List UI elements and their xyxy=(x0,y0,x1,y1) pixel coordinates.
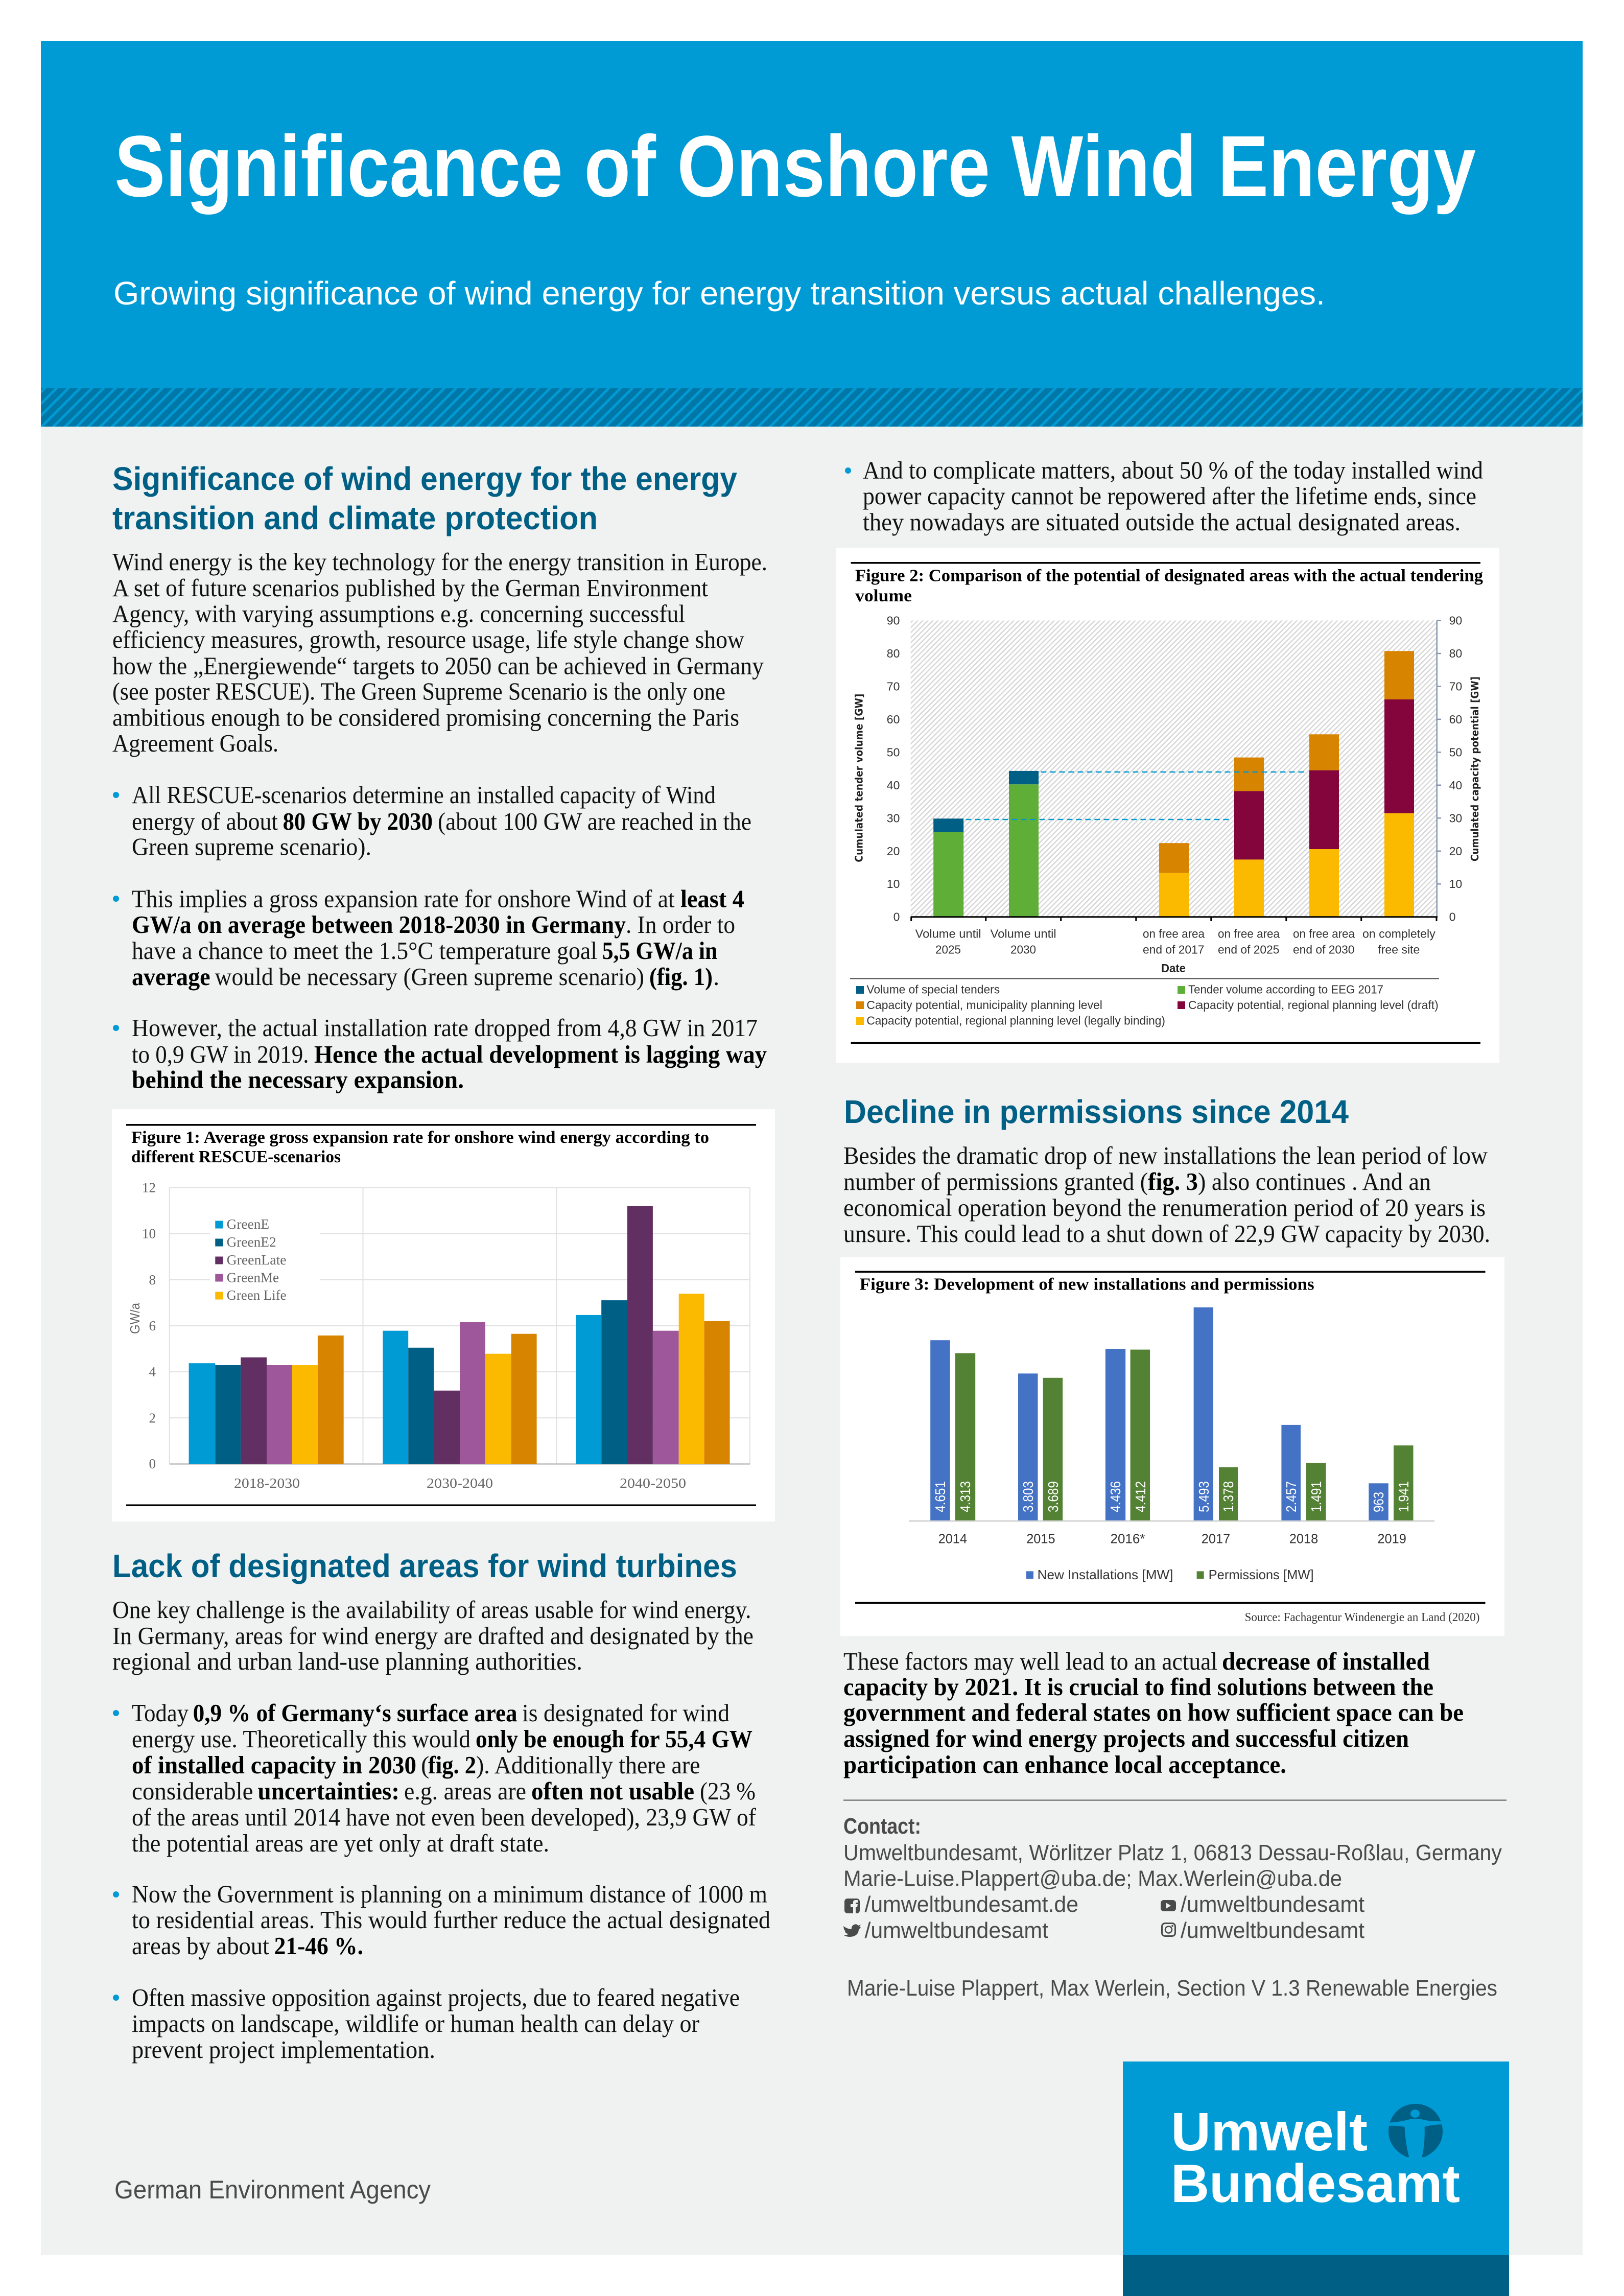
legend: New Installations [MW] xyxy=(1038,1567,1173,1582)
axes xyxy=(911,620,1441,921)
panel: figure 1 xyxy=(112,1109,775,1521)
bars: 2019 xyxy=(1369,1445,1413,1520)
figure 1 title: different RESCUE-scenarios xyxy=(131,1147,341,1166)
bullet: surface area: Today xyxy=(132,1699,189,1727)
y axis labels: 6 xyxy=(149,1318,156,1333)
x axis title: Date xyxy=(1161,962,1186,975)
subtitle: Growing significance of wind energy for energy transition versus actual challenges. xyxy=(113,275,1325,312)
bullet: expansion rate: 5,5 GW/a in xyxy=(602,936,717,965)
bars: 2016 xyxy=(1105,1349,1150,1520)
year labels: 2019 xyxy=(1377,1531,1406,1547)
bullet: opposition xyxy=(113,1983,740,2064)
figure 2 title: volume xyxy=(855,587,912,605)
twitter handle: /umweltbundesamt xyxy=(864,1918,1048,1943)
instagram handle: /umweltbundesamt xyxy=(1181,1918,1364,1943)
bullet: expansion rate: (fig. 1) xyxy=(649,963,713,991)
bullet: minimum distance: 21-46 %. xyxy=(274,1932,363,1960)
dashed reference lines xyxy=(966,772,1307,819)
bars: 2018-2030 xyxy=(189,1336,344,1464)
right axis numbers: 50 xyxy=(1449,745,1462,759)
bullet: surface area: often not usable xyxy=(531,1777,694,1805)
right axis numbers: 20 xyxy=(1449,845,1462,858)
bullet: expansion rate: This implies a gross expansion rate for onshore Wind of at xyxy=(132,885,675,912)
bullet: installed capacity xyxy=(113,781,751,860)
bars: 2017 xyxy=(1194,1307,1238,1520)
left axis numbers: 30 xyxy=(887,811,900,825)
bullet: expansion rate xyxy=(113,885,744,991)
y axis labels: 8 xyxy=(149,1272,156,1287)
icon: twitter xyxy=(843,1924,861,1937)
paragraph: key challenge xyxy=(112,1596,754,1675)
bullet: surface area: only be enough for 55,4 GW xyxy=(476,1725,752,1753)
logo block xyxy=(1123,2061,1509,2296)
y axis labels: 12 xyxy=(142,1180,156,1196)
logo wordmark: Umwelt: Umwelt xyxy=(1171,2102,1368,2162)
bullet: opposition: impacts on landscape, wildlife or human health can delay or xyxy=(132,2009,699,2037)
right axis numbers: 70 xyxy=(1449,680,1462,693)
paragraph: decline: number of permissions granted ( xyxy=(843,1167,1148,1196)
paragraph: decline: economical operation beyond the renumeration period of 20 years is xyxy=(843,1193,1486,1222)
bullet: installed capacity: (about 100 GW are reached in the xyxy=(438,807,751,835)
x axis category labels: free site xyxy=(1378,943,1420,956)
left axis numbers: 80 xyxy=(887,647,900,660)
x axis category labels: Volume until xyxy=(915,927,981,940)
contact block xyxy=(843,1814,1502,1943)
bars: 2017: 1.378 xyxy=(1220,1481,1236,1512)
legend: Volume of special tenders xyxy=(866,983,1000,996)
x axis category labels: end of 2025 xyxy=(1218,943,1279,956)
bullet: actual installation rate: Hence the actual development is lagging way xyxy=(314,1040,767,1068)
bars: 2014: 4.313 xyxy=(957,1481,973,1512)
bullet: actual installation rate: to 0,9 GW in 2019. xyxy=(132,1040,309,1068)
bullet: expansion rate: . xyxy=(713,963,719,991)
x axis category labels xyxy=(915,927,1435,956)
figure 1 title: Figure 1: Average gross expansion rate for onshore wind energy according to xyxy=(131,1128,709,1147)
heading: lack of designated areas: Lack of designated areas for wind turbines xyxy=(112,1548,737,1584)
panel: figure 3 xyxy=(840,1257,1504,1636)
bullet: actual installation rate xyxy=(113,1014,767,1094)
intro paragraph: Agency, with varying assumptions e.g. concerning successful xyxy=(112,600,685,627)
icon: human emblem xyxy=(1387,2104,1444,2158)
bars: 2015: 3.689 xyxy=(1045,1481,1061,1512)
y axis labels: 2 xyxy=(149,1410,156,1425)
bar: volume until 2030 xyxy=(1009,771,1039,917)
paragraph: decline: ) also continues . And an xyxy=(1198,1167,1431,1196)
contact emails: Marie-Luise.Plappert@uba.de; Max.Werlein@uba.de xyxy=(843,1866,1342,1891)
y axis title: GW/a xyxy=(127,1303,143,1334)
legend xyxy=(856,983,1439,1027)
x axis labels: 2040-2050 xyxy=(620,1475,686,1491)
heading: significance: transition and climate protection xyxy=(112,500,598,536)
bullet: expansion rate: least 4 xyxy=(680,885,744,912)
bullet: minimum distance xyxy=(113,1880,770,1960)
bar: free area end of 2025 xyxy=(1234,758,1264,917)
x axis category labels: 2025 xyxy=(935,943,961,956)
bullet: installed capacity: 80 GW by 2030 xyxy=(283,807,433,835)
bullet: repowering: power capacity cannot be repowered after the lifetime ends, since xyxy=(863,482,1476,510)
x axis category labels: Volume until xyxy=(991,927,1056,940)
figure 2 title: Figure 2: Comparison of the potential of designated areas with the actual tendering xyxy=(855,567,1483,585)
intro paragraph: (see poster RESCUE). The Green Supreme Scenario is the only one xyxy=(112,677,725,705)
bars: 2018: 1.491 xyxy=(1308,1481,1324,1512)
left axis title: Cumulated tender volume [GW] xyxy=(853,694,865,862)
icon: facebook xyxy=(844,1899,860,1913)
bullet: installed capacity: energy of about xyxy=(132,807,278,835)
x axis category labels: 2030 xyxy=(1010,943,1036,956)
logo wordmark: Bundesamt: Bundesamt xyxy=(1171,2153,1460,2214)
left axis numbers: 60 xyxy=(887,713,900,726)
bullet: expansion rate: . In order to xyxy=(626,910,735,939)
contact address: Umweltbundesamt, Wörlitzer Platz 1, 06813 Dessau-Roßlau, Germany xyxy=(843,1840,1502,1865)
figure 3 title: Figure 3: Development of new installations and permissions xyxy=(860,1275,1314,1294)
y axis labels xyxy=(142,1180,156,1471)
conclusion paragraph: capacity by 2021. It is crucial to find solutions between the xyxy=(843,1673,1433,1701)
panel: figure 2 xyxy=(836,548,1499,1063)
bullet: minimum distance: Now the Government is planning on a minimum distance of 1000 m xyxy=(132,1880,767,1908)
year labels xyxy=(938,1531,1406,1547)
conclusion paragraph: participation can enhance local acceptance. xyxy=(843,1750,1286,1778)
left axis numbers: 10 xyxy=(887,877,900,891)
paragraph: key challenge: regional and urban land-use planning authorities. xyxy=(112,1647,582,1675)
bars: 2019: 1.941 xyxy=(1396,1481,1411,1512)
left axis numbers: 70 xyxy=(887,680,900,693)
bars: 2019: 963 xyxy=(1371,1492,1386,1512)
bullet: surface area: energy use. Theoretically this would xyxy=(132,1725,470,1753)
x axis labels: 2018-2030 xyxy=(234,1475,300,1491)
title: Significance of Onshore Wind Energy xyxy=(114,118,1476,215)
y axis labels: 10 xyxy=(142,1226,156,1241)
youtube handle: /umweltbundesamt xyxy=(1181,1892,1364,1917)
left axis numbers: 0 xyxy=(893,910,900,924)
bullet: expansion rate: have a chance to meet the 1.5°C temperature goal xyxy=(132,936,597,965)
right axis numbers xyxy=(1449,614,1462,924)
conclusion paragraph: These factors may well lead to an actual xyxy=(843,1647,1217,1675)
bullet: surface area: of the areas until 2014 have not even been developed), 23,9 GW of xyxy=(132,1803,757,1831)
left axis numbers: 40 xyxy=(887,779,900,792)
bullet: opposition: prevent project implementation. xyxy=(132,2035,435,2064)
bullet: surface area: of installed capacity in 2030 xyxy=(132,1751,416,1779)
bars: 2015: 3.803 xyxy=(1020,1481,1036,1512)
legend: Capacity potential, municipality planning level xyxy=(866,998,1102,1012)
x axis category labels: on free area xyxy=(1218,927,1280,940)
legend: GreenLate xyxy=(227,1252,287,1268)
conclusion paragraph: assigned for wind energy projects and successful citizen xyxy=(843,1724,1409,1752)
legend: GreenMe xyxy=(227,1270,279,1285)
bar: completely free site xyxy=(1384,651,1414,917)
bullet: surface area: 0,9 % of Germany‘s surface area xyxy=(193,1699,517,1727)
conclusion paragraph: government and federal states on how sufficient space can be xyxy=(843,1698,1464,1726)
right axis numbers: 80 xyxy=(1449,647,1462,660)
figure 1 title xyxy=(131,1128,709,1166)
bars: 2014 xyxy=(930,1340,975,1520)
icon: instagram xyxy=(1162,1923,1175,1936)
right axis numbers: 60 xyxy=(1449,713,1462,726)
figure 2 title xyxy=(855,567,1483,605)
bar: free area end of 2030 xyxy=(1309,734,1339,917)
right axis numbers: 90 xyxy=(1449,614,1462,627)
year labels: 2016* xyxy=(1111,1531,1145,1547)
legend: Tender volume according to EEG 2017 xyxy=(1188,983,1383,996)
bullet: surface area: the potential areas are yet only at draft state. xyxy=(132,1829,549,1857)
legend: GreenE xyxy=(227,1216,269,1232)
facebook handle: /umweltbundesamt.de xyxy=(864,1892,1078,1917)
bullet: opposition: Often massive opposition against projects, due to feared negative xyxy=(132,1983,740,2011)
bullet: minimum distance: areas by about xyxy=(132,1932,269,1960)
contact heading: Contact: xyxy=(843,1814,921,1839)
right axis numbers: 30 xyxy=(1449,811,1462,825)
bullet: surface area: e.g. areas are xyxy=(404,1777,526,1805)
left axis numbers: 20 xyxy=(887,845,900,858)
bullet: surface area xyxy=(113,1699,757,1857)
left axis numbers xyxy=(887,614,900,924)
bullet: repowering xyxy=(845,456,1483,536)
bar: volume until 2025 xyxy=(933,818,963,917)
y axis labels: 0 xyxy=(149,1456,156,1471)
bullet: repowering: they nowadays are situated outside the actual designated areas. xyxy=(863,508,1461,536)
bullet: surface area: (23 % xyxy=(700,1777,756,1805)
bullet: expansion rate: would be necessary (Green supreme scenario) xyxy=(215,963,644,991)
x axis category labels: on free area xyxy=(1293,927,1355,940)
bullet: installed capacity: Green supreme scenario). xyxy=(132,833,371,860)
bars: 2030-2040 xyxy=(383,1322,537,1464)
year labels: 2014 xyxy=(938,1531,967,1547)
bars: 2015 xyxy=(1018,1373,1063,1520)
left axis numbers: 90 xyxy=(887,614,900,627)
year labels: 2015 xyxy=(1026,1531,1055,1547)
bullet: surface area: is designated for wind xyxy=(522,1699,729,1727)
intro paragraph: efficiency measures, growth, resource usage, life style change show xyxy=(112,625,745,653)
legend xyxy=(210,1216,320,1306)
bars: 2018 xyxy=(1281,1425,1326,1520)
legend: Permissions [MW] xyxy=(1209,1567,1314,1582)
heading: significance: Significance of wind energy for the energy xyxy=(112,460,737,497)
bars: 2016: 4.412 xyxy=(1133,1481,1148,1512)
section: decline in permissions xyxy=(843,1093,1490,1248)
bullet: expansion rate: GW/a on average between 2018-2030 in Germany xyxy=(132,910,626,939)
year labels: 2017 xyxy=(1202,1531,1230,1547)
year labels: 2018 xyxy=(1289,1531,1318,1547)
right axis title: Cumulated capacity potential [GW] xyxy=(1469,676,1481,861)
legend xyxy=(1026,1567,1314,1582)
y axis labels: 4 xyxy=(149,1364,156,1379)
intro paragraph: Agreement Goals. xyxy=(112,729,278,757)
paragraph: decline xyxy=(843,1141,1490,1248)
bars: 2016: 4.436 xyxy=(1108,1481,1123,1512)
x axis labels: 2030-2040 xyxy=(427,1475,493,1491)
x axis category labels: on completely xyxy=(1362,927,1435,940)
legend: Capacity potential, regional planning level (draft) xyxy=(1188,998,1439,1012)
bullet: surface area: uncertainties: xyxy=(257,1777,399,1805)
icon: youtube xyxy=(1161,1900,1176,1911)
paragraph: decline: unsure. This could lead to a shut down of 22,9 GW capacity by 2030. xyxy=(843,1220,1490,1248)
bars: 2017: 5.493 xyxy=(1196,1481,1212,1512)
conclusion paragraph: decrease of installed xyxy=(1222,1647,1430,1675)
right axis numbers: 10 xyxy=(1449,877,1462,891)
source note: Source: Fachagentur Windenergie an Land (2020) xyxy=(1245,1611,1479,1624)
bullet: actual installation rate: behind the necessary expansion. xyxy=(132,1066,464,1094)
header banner xyxy=(41,41,1583,427)
bullet: surface area: considerable xyxy=(132,1777,253,1805)
intro paragraph: ambitious enough to be considered promising concerning the Paris xyxy=(112,703,739,732)
paragraph: decline: fig. 3 xyxy=(1148,1167,1198,1196)
bullet: minimum distance: to residential areas. This would further reduce the actual designated xyxy=(132,1906,770,1934)
bullet: surface area: ). Additionally there are xyxy=(476,1751,700,1779)
bullet: surface area: fig. 2 xyxy=(428,1751,476,1779)
heading: significance xyxy=(112,460,737,536)
bullet: installed capacity: All RESCUE-scenarios determine an installed capacity of Wind xyxy=(132,781,716,809)
x axis category labels: on free area xyxy=(1143,927,1205,940)
conclusion paragraph xyxy=(843,1647,1464,1778)
paragraph: key challenge: One key challenge is the availability of areas usable for wind energy. xyxy=(112,1596,751,1624)
footer label: German Environment Agency: German Environment Agency xyxy=(114,2175,431,2204)
x axis labels xyxy=(234,1475,686,1491)
section: lack of designated areas xyxy=(112,1548,770,2064)
bullet: surface area: ( xyxy=(421,1751,429,1779)
bullet: repowering: And to complicate matters, about 50 % of the today installed wind xyxy=(863,456,1483,484)
left axis numbers: 50 xyxy=(887,745,900,759)
x axis category labels: end of 2017 xyxy=(1143,943,1205,956)
bullet: expansion rate: average xyxy=(132,963,210,991)
intro paragraph: A set of future scenarios published by the German Environment xyxy=(112,574,708,602)
legend: Green Life xyxy=(227,1287,287,1303)
legend: GreenE2 xyxy=(227,1234,276,1250)
x axis category labels: end of 2030 xyxy=(1293,943,1355,956)
legend: Capacity potential, regional planning level (legally binding) xyxy=(866,1014,1165,1027)
heading: decline: Decline in permissions since 2014 xyxy=(844,1093,1349,1130)
right axis numbers: 40 xyxy=(1449,779,1462,792)
bars: 2040-2050 xyxy=(576,1206,730,1464)
intro paragraph xyxy=(112,548,767,757)
intro paragraph: how the „Energiewende“ targets to 2050 can be achieved in Germany xyxy=(112,652,764,680)
bars: 2018: 2.457 xyxy=(1283,1481,1299,1512)
paragraph: key challenge: In Germany, areas for wind energy are drafted and designated by the xyxy=(112,1622,754,1650)
right axis numbers: 0 xyxy=(1449,910,1455,924)
paragraph: decline: Besides the dramatic drop of new installations the lean period of low xyxy=(843,1141,1488,1169)
intro paragraph: Wind energy is the key technology for the energy transition in Europe. xyxy=(112,548,767,576)
bars: 2014: 4.651 xyxy=(932,1481,948,1512)
bullet: actual installation rate: However, the actual installation rate dropped from 4,8 GW in 2017 xyxy=(132,1014,758,1042)
authors line: Marie-Luise Plappert, Max Werlein, Section V 1.3 Renewable Energies xyxy=(847,1976,1497,2001)
bar: free area end of 2017 xyxy=(1159,843,1189,917)
section: significance of wind energy xyxy=(112,460,767,1094)
